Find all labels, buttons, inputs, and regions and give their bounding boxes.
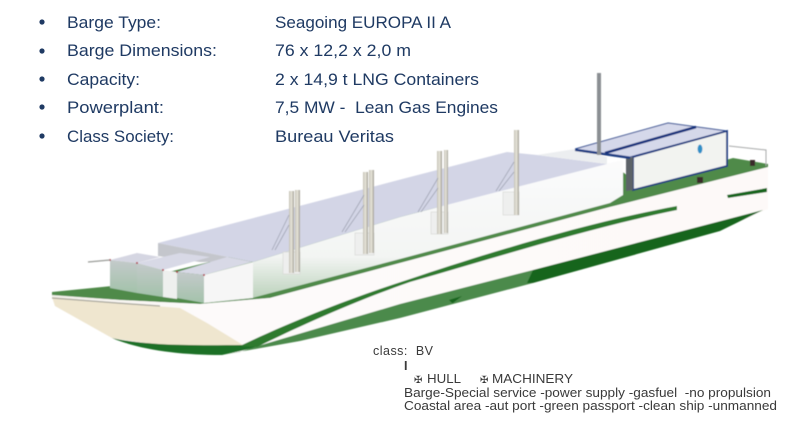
bow railing [88, 260, 110, 262]
class notation: class: BV [373, 344, 434, 358]
class notation: Coastal area -aut port -green passport -clean ship -unmanned [404, 399, 777, 413]
front containers [109, 253, 253, 303]
tank block wall [252, 160, 623, 298]
hull side [52, 167, 768, 355]
dark green lower band [527, 210, 763, 283]
container roof [575, 123, 727, 157]
stern stripe [727, 188, 767, 198]
specification list [39, 13, 498, 146]
class notation: HULL [427, 372, 461, 386]
class notation: I [404, 359, 407, 373]
bow beige [52, 297, 243, 347]
exhaust stacks [289, 73, 601, 273]
spec values [275, 13, 498, 146]
bullets [39, 19, 45, 139]
bow crescent [112, 338, 258, 355]
spec labels: Barge Dimensions: [67, 41, 217, 60]
spec values: 7,5 MW - Lean Gas Engines [275, 98, 498, 117]
class notation: ✠ [480, 375, 488, 386]
container side [633, 131, 727, 190]
spec values: Bureau Veritas [275, 127, 394, 146]
dark wedges on band [449, 296, 462, 303]
spec labels: Capacity: [67, 70, 140, 89]
bow deck line [52, 298, 160, 306]
upper green stripes [240, 206, 677, 347]
class notation: MACHINERY [492, 372, 574, 386]
spec labels: Barge Type: [67, 13, 161, 32]
light roof extension [537, 149, 607, 164]
container roof edge [575, 150, 630, 158]
stack bases [283, 192, 519, 274]
class notation: ✠ [414, 375, 422, 386]
container end [626, 157, 633, 191]
deck bollards [697, 160, 755, 183]
spec labels [67, 13, 217, 146]
class notation: Barge-Special service -power supply -gasfuel -no propulsion [404, 386, 771, 400]
stay cables [272, 162, 514, 250]
barge illustration [52, 73, 768, 355]
deck [52, 158, 768, 304]
spec labels: Class Society: [67, 127, 174, 146]
green lower band [222, 270, 533, 355]
class notation [373, 344, 777, 413]
tank block rear face [158, 243, 253, 262]
stern railing [729, 146, 766, 166]
spec values: 76 x 12,2 x 2,0 m [275, 41, 411, 60]
spec values: Seagoing EUROPA II A [275, 13, 452, 32]
stern containers [575, 123, 727, 191]
water drop logo [698, 144, 702, 154]
tank block roof [158, 152, 607, 262]
spec labels: Powerplant: [67, 98, 164, 117]
spec values: 2 x 14,9 t LNG Containers [275, 70, 479, 89]
roof seam [605, 127, 696, 153]
